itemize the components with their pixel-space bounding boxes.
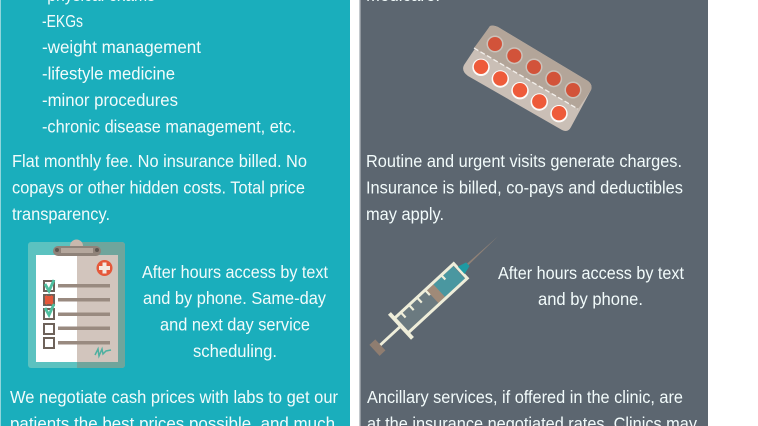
after hours text: After hours access by text: [498, 263, 684, 283]
services list: -EKGs: [42, 11, 83, 31]
pricing text: copays or other hidden costs. Total price: [12, 178, 305, 198]
panel: teal membership column: [0, 0, 350, 426]
panel: gray traditional column: [359, 0, 708, 426]
routine visits text: [366, 151, 683, 224]
ancillary services text: Ancillary services, if offered in the clinic, are: [367, 387, 683, 407]
pricing text: [12, 151, 307, 224]
routine visits text: Routine and urgent visits generate charges.: [366, 151, 682, 171]
after hours text: [142, 262, 328, 361]
services list: -weight management: [42, 37, 201, 57]
services list: -minor procedures: [42, 90, 178, 110]
lab pricing text: We negotiate cash prices with labs to get our: [10, 387, 338, 407]
services list: [42, 0, 296, 136]
after hours text: and next day service: [160, 314, 310, 334]
icon: syringe: [363, 224, 509, 363]
after hours text: After hours access by text: [142, 262, 328, 282]
pricing text: transparency.: [12, 204, 110, 224]
icon: blister pack of pills: [463, 26, 592, 131]
after hours text: and by phone.: [538, 289, 643, 309]
services list: -lifestyle medicine: [42, 64, 175, 84]
icon: clipboard: [28, 240, 125, 368]
after hours text: and by phone. Same-day: [143, 288, 326, 308]
after hours text: [498, 263, 684, 309]
routine visits text: may apply.: [366, 204, 444, 224]
routine visits text: Insurance is billed, co-pays and deductibles: [366, 178, 683, 198]
ancillary services text: [367, 387, 697, 426]
after hours text: scheduling.: [193, 341, 277, 361]
pricing text: Flat monthly fee. No insurance billed. No: [12, 151, 307, 171]
services list: -chronic disease management, etc.: [42, 116, 296, 136]
lab pricing text: [10, 387, 338, 426]
